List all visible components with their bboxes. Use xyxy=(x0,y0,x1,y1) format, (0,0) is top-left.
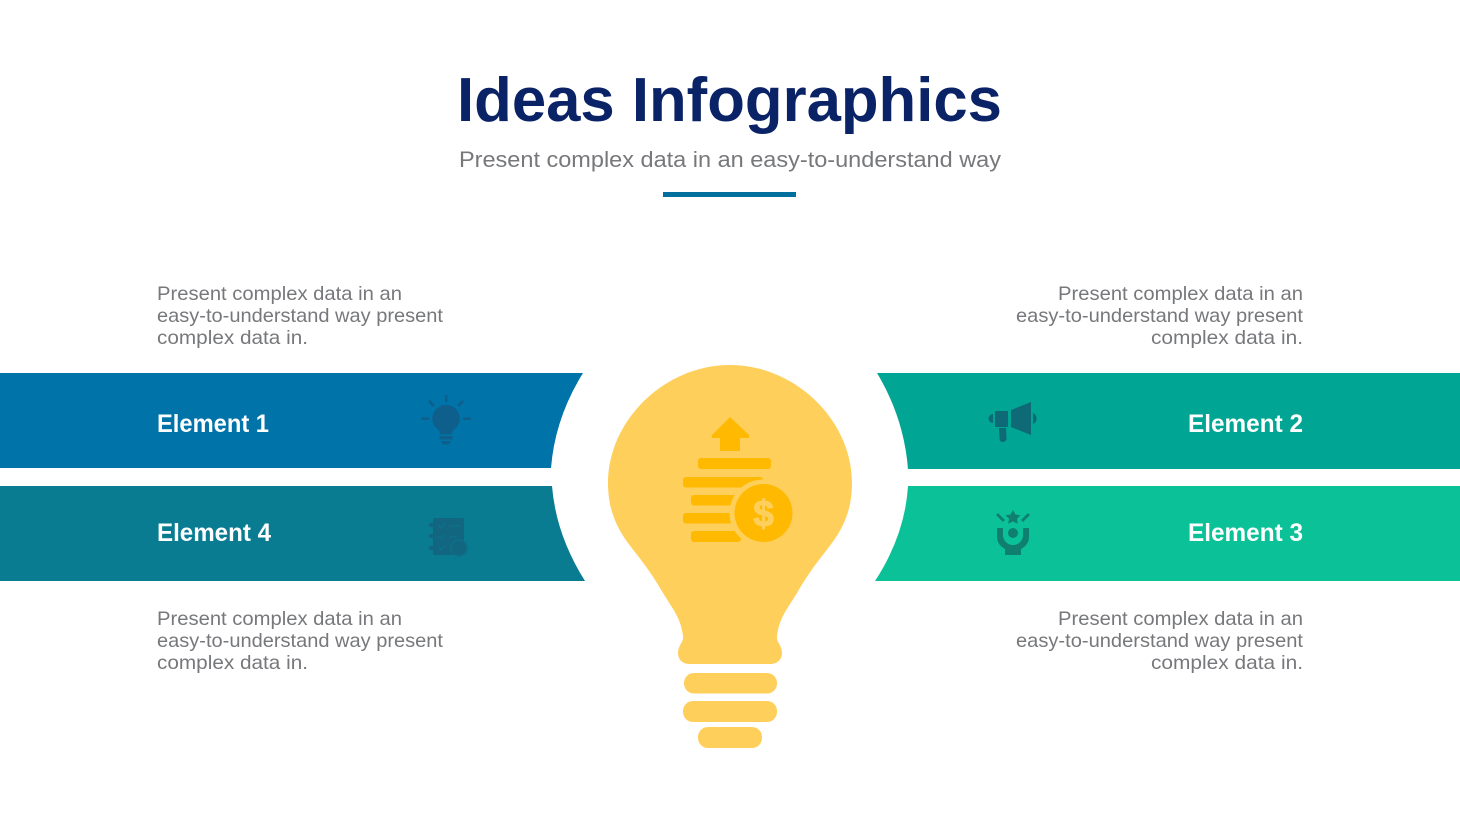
text block: top left: easy-to-understand way present xyxy=(157,305,444,327)
icon: megaphone xyxy=(988,402,1037,442)
text block: top right: complex data in. xyxy=(1151,327,1303,349)
icon: light bulb xyxy=(421,395,471,444)
panel: element 3 band xyxy=(875,486,1460,581)
icon: checklist xyxy=(429,518,467,556)
text block: bottom right: Present complex data in an xyxy=(1058,608,1303,630)
panel: element 2 band xyxy=(877,373,1460,469)
icon: person with star xyxy=(996,510,1030,555)
title underline xyxy=(663,192,796,197)
panel: element 4 band xyxy=(0,486,585,581)
icon: coins with arrow xyxy=(683,417,796,546)
text block: bottom right: complex data in. xyxy=(1151,652,1303,674)
text block: bottom left: easy-to-understand way present xyxy=(157,630,444,652)
label: element 4: Element 4 xyxy=(157,519,271,547)
panel: element 1 band xyxy=(0,373,583,468)
text block: bottom left: complex data in. xyxy=(157,652,308,674)
text block: bottom right xyxy=(1016,608,1304,674)
label: element 2: Element 2 xyxy=(1188,410,1303,438)
text block: top left: Present complex data in an xyxy=(157,283,402,305)
text block: bottom right: easy-to-understand way present xyxy=(1016,630,1304,652)
title: Ideas Infographics xyxy=(457,66,1002,135)
text block: top right: easy-to-understand way present xyxy=(1016,305,1304,327)
screw thread 2 xyxy=(683,701,777,722)
label: element 3: Element 3 xyxy=(1188,519,1303,547)
icon: coins with arrow: $ xyxy=(753,493,774,534)
screw thread 3 xyxy=(698,727,762,748)
screw thread 1 xyxy=(684,673,777,694)
label: element 1: Element 1 xyxy=(157,410,269,438)
subtitle: Present complex data in an easy-to-understand way xyxy=(459,147,1002,172)
light bulb xyxy=(608,365,852,748)
text block: top right xyxy=(1016,283,1304,349)
bulb body xyxy=(608,365,852,664)
text block: bottom left xyxy=(157,608,444,674)
text block: top left: complex data in. xyxy=(157,327,308,349)
text block: top left xyxy=(157,283,444,349)
text block: bottom left: Present complex data in an xyxy=(157,608,402,630)
text block: top right: Present complex data in an xyxy=(1058,283,1303,305)
